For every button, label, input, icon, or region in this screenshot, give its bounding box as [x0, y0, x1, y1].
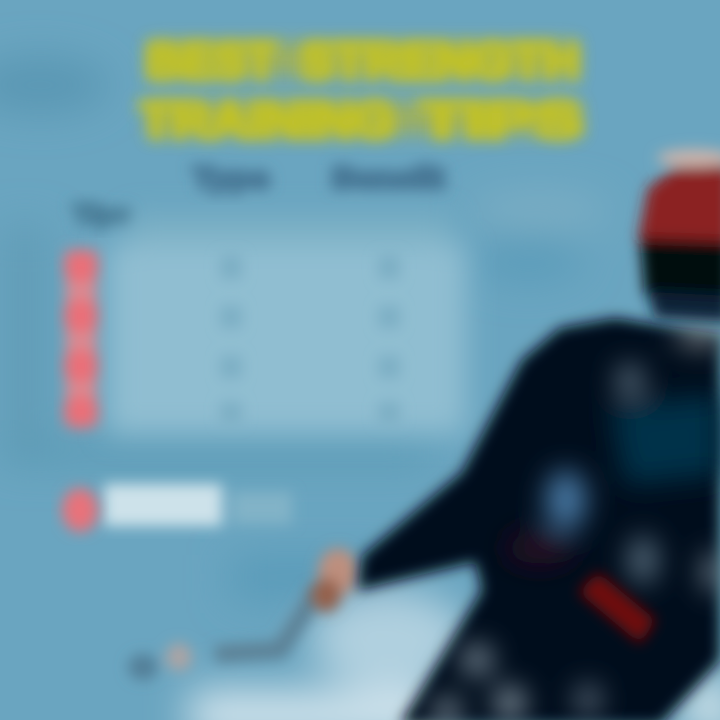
title — [140, 33, 583, 148]
callout icon — [62, 488, 98, 532]
table row header: Tips — [73, 199, 131, 229]
callout text — [104, 484, 292, 526]
title text: STRENGTH — [300, 33, 580, 89]
tow rope handle — [128, 590, 318, 680]
title text: BEST — [146, 33, 276, 89]
title text: TRAINING — [140, 92, 395, 148]
title glow — [148, 42, 578, 134]
athlete body — [358, 318, 720, 720]
table column headers: Type — [193, 162, 269, 195]
table column headers — [193, 162, 444, 195]
panel: table — [108, 215, 466, 434]
title text — [140, 33, 583, 148]
callout — [62, 484, 292, 532]
row markers — [64, 250, 98, 428]
title text: TIPS — [420, 92, 583, 148]
athlete red stripe — [578, 572, 656, 644]
athlete hand — [311, 548, 358, 612]
athlete head and helmet — [638, 149, 720, 322]
table cell marks — [220, 255, 400, 424]
table column headers: Benefit — [332, 162, 444, 195]
athlete suit details — [435, 325, 720, 720]
photo: athlete — [128, 149, 720, 720]
